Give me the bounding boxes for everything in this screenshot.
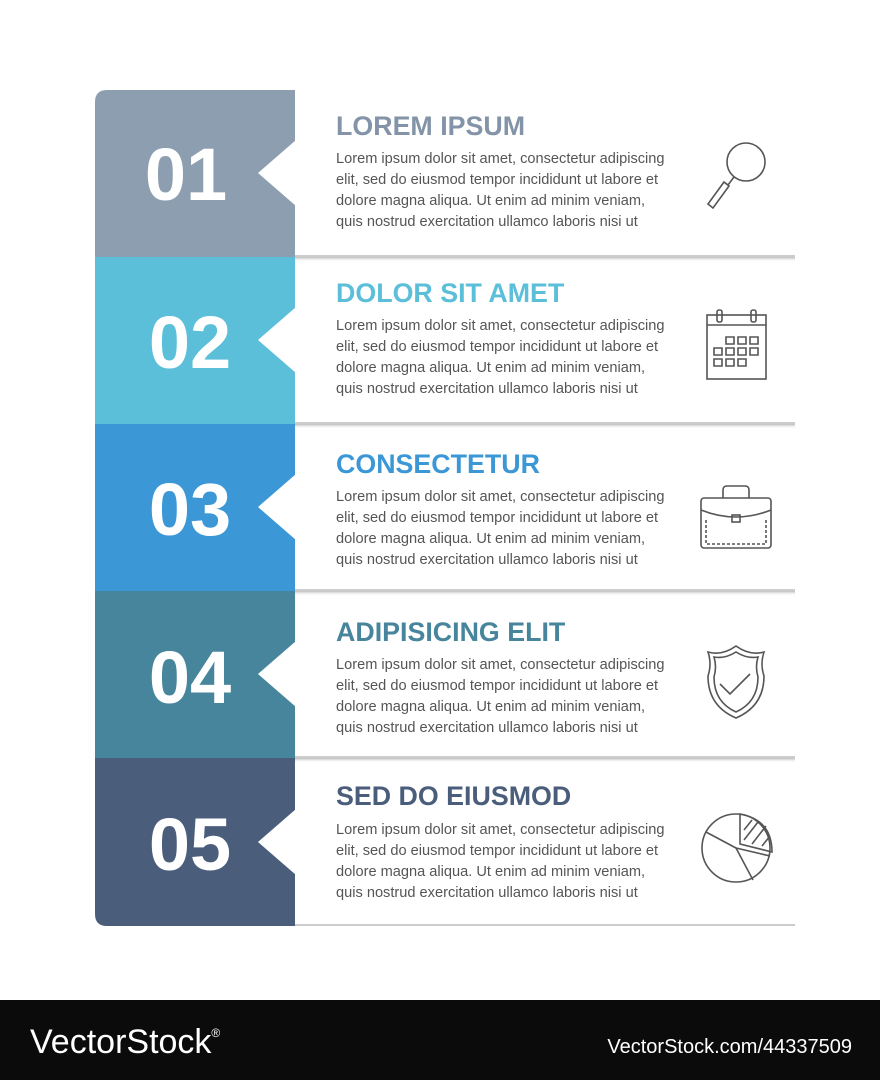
row 5: Lorem ipsum dolor sit amet, consectetur adipiscing (336, 822, 665, 838)
icon: shield (708, 646, 764, 718)
row 5: 05 (149, 803, 231, 886)
footer bar (0, 1000, 880, 1080)
row 4: elit, sed do eiusmod tempor incididunt ut labore et (336, 678, 658, 694)
row 5: quis nostrud exercitation ullamco laboris nisi ut (336, 885, 638, 901)
row 2: elit, sed do eiusmod tempor incididunt ut labore et (336, 339, 658, 355)
row 5: elit, sed do eiusmod tempor incididunt ut labore et (336, 843, 658, 859)
row 3: CONSECTETUR (336, 449, 540, 479)
footer bar: VectorStock.com/44337509 (607, 1036, 852, 1058)
row 5: SED DO EIUSMOD (336, 781, 571, 811)
row 2: DOLOR SIT AMET (336, 278, 565, 308)
row 1: dolore magna aliqua. Ut enim ad minim veniam, (336, 193, 645, 209)
row 3: dolore magna aliqua. Ut enim ad minim veniam, (336, 531, 645, 547)
row 1: LOREM IPSUM (336, 111, 525, 141)
row 2: dolore magna aliqua. Ut enim ad minim veniam, (336, 360, 645, 376)
row 2 (149, 278, 795, 429)
row 1: elit, sed do eiusmod tempor incididunt ut labore et (336, 172, 658, 188)
row 1 (145, 111, 795, 262)
row 3: quis nostrud exercitation ullamco laboris nisi ut (336, 552, 638, 568)
row 4: dolore magna aliqua. Ut enim ad minim veniam, (336, 699, 645, 715)
row 4: ADIPISICING ELIT (336, 617, 566, 647)
row 1: 01 (145, 133, 227, 216)
footer bar: VectorStock (30, 1023, 211, 1061)
row 2: Lorem ipsum dolor sit amet, consectetur adipiscing (336, 318, 665, 334)
row 4 (149, 617, 795, 763)
footer bar: ® (211, 1026, 220, 1040)
row 1: Lorem ipsum dolor sit amet, consectetur adipiscing (336, 151, 665, 167)
row 3 (149, 449, 795, 596)
row 5 (149, 781, 795, 926)
row 4: 04 (149, 636, 231, 719)
row 4: quis nostrud exercitation ullamco laboris nisi ut (336, 720, 638, 736)
row 3: 03 (149, 468, 231, 551)
row 5: dolore magna aliqua. Ut enim ad minim veniam, (336, 864, 645, 880)
icon: magnifier (708, 143, 765, 208)
icon: briefcase (701, 486, 771, 548)
row 1: quis nostrud exercitation ullamco laboris nisi ut (336, 214, 638, 230)
left number column (95, 90, 295, 926)
row 3: Lorem ipsum dolor sit amet, consectetur adipiscing (336, 489, 665, 505)
row 4: Lorem ipsum dolor sit amet, consectetur adipiscing (336, 657, 665, 673)
row 2: quis nostrud exercitation ullamco laboris nisi ut (336, 381, 638, 397)
icon: calendar (707, 310, 766, 379)
row 2: 02 (149, 301, 231, 384)
row 3: elit, sed do eiusmod tempor incididunt ut labore et (336, 510, 658, 526)
icon: pie chart (702, 814, 772, 882)
